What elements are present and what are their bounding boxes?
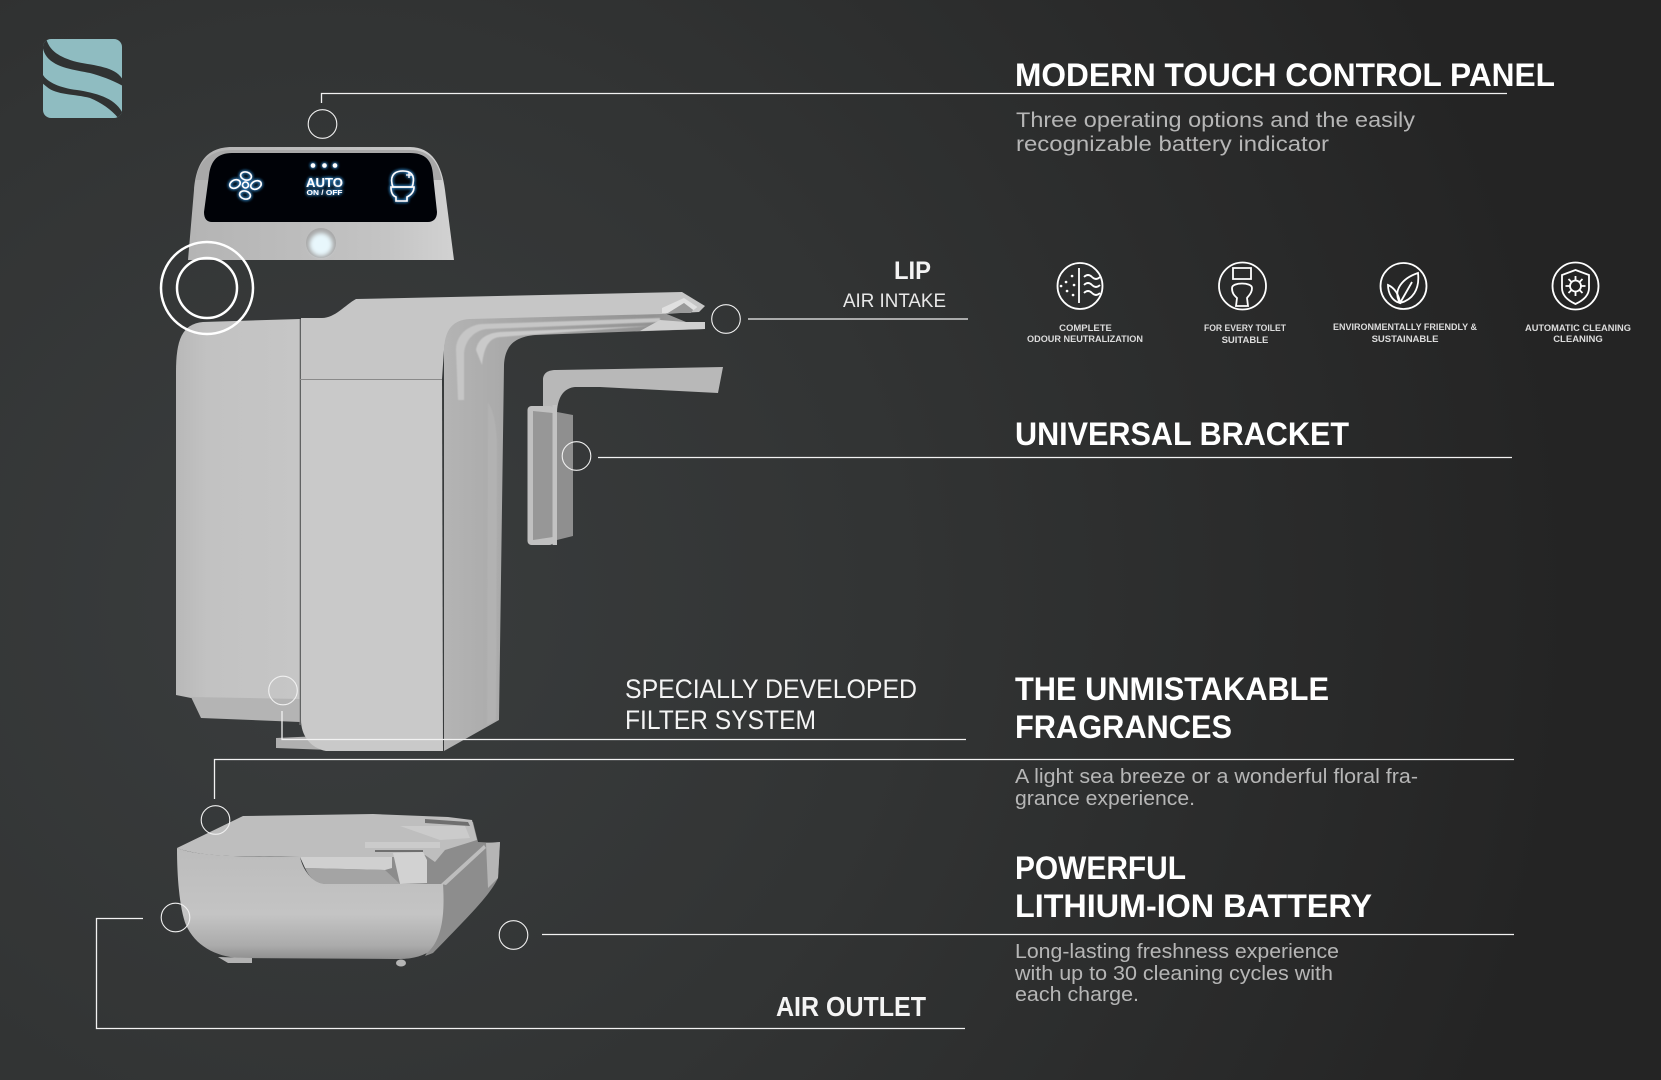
leader line: filter [282,711,966,740]
icon: three indicator dots [311,163,337,168]
backing plate left [528,406,554,545]
bracket arm [543,367,723,412]
feature: odour neutralization: ODOUR NEUTRALIZATION [1027,334,1143,345]
feature: odour neutralization: COMPLETE [1059,323,1112,334]
heading: powerful lithium-ion battery: POWERFUL [1015,850,1186,886]
small tab [276,736,330,750]
interior [290,822,498,888]
marker: fragrances [201,806,230,834]
front shell [177,848,444,959]
auto on/off label: ON / OFF [306,190,343,197]
feet [218,957,252,963]
feature: environmentally friendly [1333,263,1477,345]
leader line: lip [748,318,968,320]
left panel [176,319,300,700]
feature: automatic cleaning [1525,262,1631,345]
marker: control panel [308,110,337,138]
heading: powerful lithium-ion battery: LITHIUM-ION BATTERY [1015,888,1372,924]
marker: lip [712,305,740,333]
feature: odour neutralization [1027,263,1143,345]
feature: environmentally friendly: SUSTAINABLE [1372,334,1438,345]
heading: modern touch control panel: MODERN TOUCH CONTROL PANEL [1015,57,1555,93]
feature: every toilet: FOR EVERY TOILET [1204,323,1286,334]
label: filter system: FILTER SYSTEM [625,705,816,735]
product: touch control panel [188,147,454,260]
label: filter system: SPECIALLY DEVELOPED [625,674,917,704]
icon: leaf [1380,263,1426,309]
text: control panel description: recognizable battery indicator [1016,133,1329,156]
arm underside highlights [456,318,660,400]
product: main body [176,292,705,751]
text: control panel description: Three operating options and the easily [1016,109,1416,132]
icon: toilet [391,171,414,201]
lip channel detail [662,298,698,313]
marker: bracket [562,442,591,470]
label: lip: LIP [894,257,931,285]
heading: the unmistakable fragrances: FRAGRANCES [1015,709,1232,745]
text: battery description: with up to 30 cleaning cycles with [1014,963,1333,985]
text: battery description: Long-lasting freshness experience [1015,941,1339,963]
top tray [177,814,477,862]
leader line: bracket [598,456,1512,458]
icon: toilet [1219,262,1266,310]
icon: odour neutralization [1058,263,1102,309]
seam lines [300,319,442,725]
touch screen [204,153,437,222]
leader line: fragrances [214,760,1514,799]
inner light wall [393,852,427,884]
body side [444,312,705,751]
bracket neck [552,405,557,545]
feature: every toilet [1204,262,1286,346]
icon: brand logo [42,38,123,119]
leader line: air outlet [96,918,965,1028]
label: air intake: AIR INTAKE [843,291,946,312]
feature: automatic cleaning: CLEANING [1553,334,1603,345]
callout: big double circle [161,242,253,334]
heading: universal bracket: UNIVERSAL BRACKET [1015,416,1349,452]
notch ledge [300,857,392,870]
text: battery description: each charge. [1015,984,1139,1006]
feature: environmentally friendly: ENVIRONMENTALLY FRIENDLY & [1333,322,1477,333]
text: fragrances description: A light sea breeze or a wonderful floral fra- [1015,766,1418,788]
marker: air outlet [161,903,190,932]
auto on/off label: AUTO [306,176,343,190]
panel housing [188,147,454,260]
leader line: battery [542,934,1514,936]
product: universal bracket [528,367,723,545]
marker: filter [269,676,297,705]
icon: fan [228,171,263,200]
button light [306,228,336,258]
feature: every toilet: SUITABLE [1222,335,1268,346]
side rim [487,403,497,725]
label: air outlet: AIR OUTLET [776,991,926,1022]
marker: battery [499,921,528,949]
icon: shield [1552,262,1598,310]
backing plate right [557,412,573,540]
top front cover [301,292,705,379]
side wall [425,842,500,956]
leader line: control panel [322,94,1507,103]
feature: automatic cleaning: AUTOMATIC CLEANING [1525,323,1631,334]
product: battery cartridge [177,814,500,966]
front panel [301,380,443,751]
text: fragrances description: grance experience. [1015,788,1195,810]
auto on/off label [306,176,343,197]
heading: the unmistakable fragrances: THE UNMISTAKABLE [1015,671,1329,707]
lower left foot [191,697,300,722]
